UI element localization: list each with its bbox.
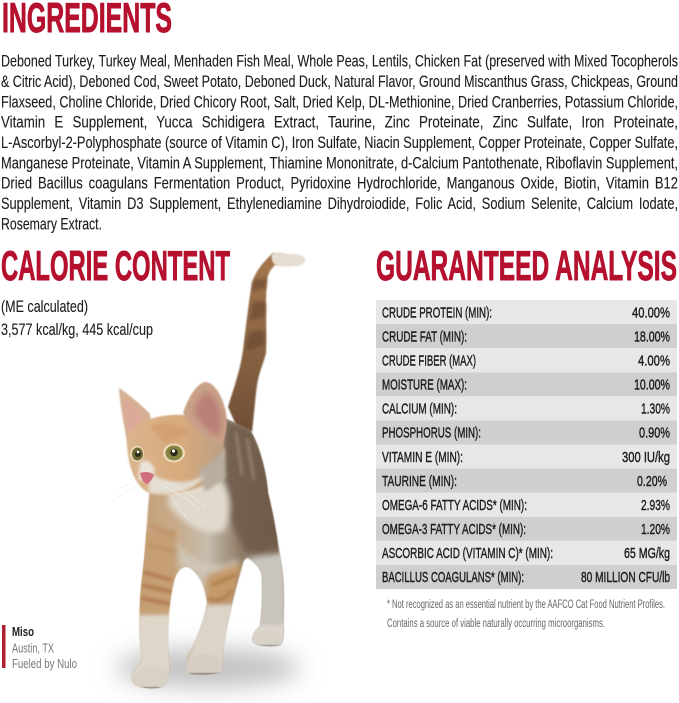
kitten ground shadow: [116, 648, 300, 688]
illustration: kitten: [112, 252, 305, 692]
kitten body and legs: [132, 418, 284, 688]
kitten fur markings: [140, 419, 284, 628]
table: nutrient analysis: CALCIUM (MIN):: [382, 401, 457, 418]
table: nutrient analysis: CRUDE PROTEIN (MIN):: [382, 304, 492, 321]
table: nutrient analysis: TAURINE (MIN):: [382, 473, 457, 490]
caption tagline: Fueled by Nulo: [12, 656, 77, 671]
caption: cat name and location: [2, 624, 77, 671]
table: nutrient analysis: OMEGA-6 FATTY ACIDS* (MIN):: [382, 497, 527, 514]
table: nutrient analysis: BACILLUS COAGULANS* (MIN):: [382, 569, 524, 586]
kitten right eye: [163, 444, 185, 462]
panel: ingredients: [1, 0, 678, 233]
kitten paws: [140, 644, 280, 688]
table: nutrient analysis: MOISTURE (MAX):: [382, 376, 467, 394]
kitten nose: [140, 472, 154, 484]
table: nutrient analysis: ASCORBIC ACID (VITAMIN C)* (MIN):: [382, 545, 553, 562]
table: nutrient analysis: OMEGA-3 FATTY ACIDS* (MIN):: [382, 521, 526, 538]
kitten head shape: [127, 415, 225, 494]
caption location: Austin, TX: [12, 640, 54, 656]
kitten head: [112, 382, 227, 520]
text: calorie method: (ME calculated): [1, 297, 88, 316]
caption accent bar: [2, 625, 6, 668]
text block: ingredients list: Rosemary Extract.: [1, 214, 102, 233]
heading: calorie content: CALORIE CONTENT: [1, 242, 230, 289]
text: calorie values: 3,577 kcal/kg, 445 kcal/cup: [1, 320, 153, 339]
table: nutrient analysis: CRUDE FIBER (MAX): [382, 352, 476, 370]
table: nutrient analysis: VITAMIN E (MIN):: [382, 449, 463, 466]
table: nutrient analysis: [376, 300, 677, 589]
kitten face markings: [138, 423, 226, 494]
caption name: Miso: [12, 624, 34, 639]
table: nutrient analysis: 0.20%: [637, 473, 667, 490]
panel: calorie content: [1, 242, 230, 339]
kitten right ear: [183, 382, 227, 445]
table: nutrient analysis: PHOSPHORUS (MIN):: [382, 425, 481, 442]
kitten left ear: [119, 388, 152, 447]
panel: guaranteed analysis: [376, 242, 677, 630]
kitten tail: [228, 252, 305, 432]
text block: ingredients list: [1, 52, 678, 233]
kitten whiskers: [112, 482, 205, 520]
kitten left eye: [130, 446, 144, 462]
table: nutrient analysis: CRUDE FAT (MIN):: [382, 328, 467, 345]
